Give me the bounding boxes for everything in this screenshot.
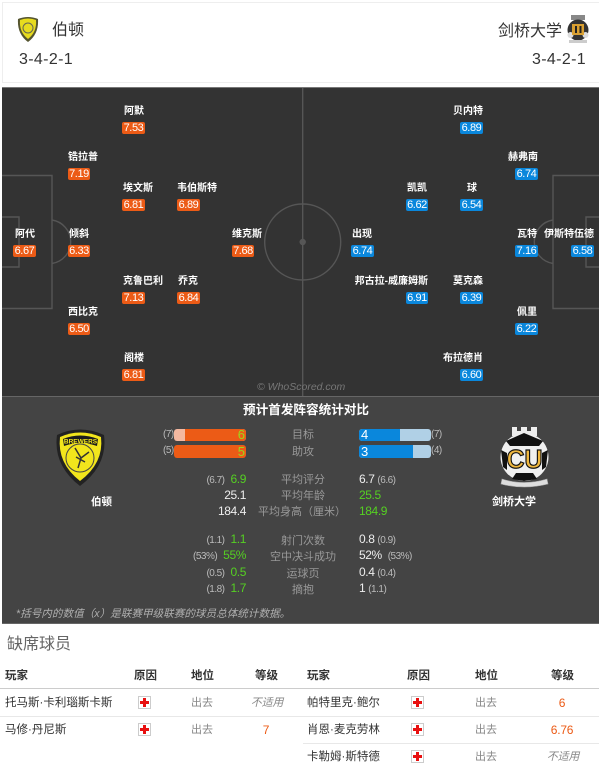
home stat values [193,472,246,595]
player: 阁楼: 6.81 [124,369,143,381]
icon: Burton Albion crest: BREWERS [64,438,98,446]
player: 阿代 [13,228,36,257]
assists league average home: (5) [163,445,174,456]
assists league average away: (4) [431,445,442,456]
player: 伊斯特伍德: 6.58 [573,245,592,257]
player: 球: 球 [467,183,477,194]
player: 凯凯: 6.62 [407,199,427,211]
footnote: *括号内的数值（x）是联赛甲级联赛的球员总体统计数据。 [16,608,290,620]
table: missing players home: 出去 [191,724,213,736]
table: missing players home: 托马斯·卡利瑙斯卡斯 [5,697,112,709]
home stat values: (1.1) 1.1 [206,532,246,546]
table: missing players away: 6 [559,696,565,710]
player: 锆拉普 [68,150,98,180]
player: 克鲁巴利: 克鲁巴利 [123,276,163,287]
table: missing players away: 玩家 [307,670,330,682]
away stat values: 184.9 [359,504,387,518]
away stat values: 1 (1.1) [359,581,386,595]
chart: assists bar home [174,445,246,458]
player: 韦伯斯特 [177,182,217,211]
player: 出现: 出现 [352,229,372,240]
away stat values: 6.7 (6.6) [359,472,395,486]
table: missing players home: 等级 [255,670,278,682]
stat labels: 目标 [292,429,314,441]
away stat values: 52% (53%) [359,548,412,562]
player: 邦古拉-威廉姆斯: 邦古拉-威廉姆斯 [355,276,428,287]
player: 球 [460,182,483,211]
pitch markings [2,88,599,396]
player: 乔克 [177,275,200,304]
icon: Burton crest small [18,17,38,42]
player: 赫弗南: 赫弗南 [508,152,538,163]
player: 球: 6.54 [462,199,481,211]
stat labels: 助攻 [292,446,314,458]
player: 伊斯特伍德 [544,228,594,257]
player: 克鲁巴利: 7.13 [124,292,143,304]
player: 赫弗南 [508,151,538,180]
away stat values [359,472,412,595]
player: 伊斯特伍德: 伊斯特伍德 [544,229,594,240]
panel: lineup stats comparison [2,397,599,624]
table: missing players home: 玩家 [5,670,28,682]
player: 阿默: 阿默 [124,106,144,117]
player: 贝内特: 贝内特 [453,106,483,117]
table: missing players away [303,669,599,763]
home stat values: 184.4 [218,504,246,518]
chart: goals bar home [174,429,246,441]
goals league average away: (7) [431,429,442,440]
table: missing players away: 出去 [475,697,497,709]
stat labels: 空中决斗成功 [270,551,336,563]
goals league average home: (7) [163,429,174,440]
table: missing players home [0,669,300,737]
player: 倾斜: 6.33 [69,245,89,257]
player: 莫克森: 6.39 [462,292,481,304]
player: 瓦特: 瓦特 [517,229,537,240]
player: 佩里: 佩里 [517,307,537,318]
table: missing players home: 地位 [191,670,214,682]
player: 阁楼 [122,352,145,381]
player: 阿代: 阿代 [15,229,35,240]
player: 凯凯 [406,182,428,211]
player: 埃文斯: 埃文斯 [123,183,153,194]
icon: Cambridge United crest [500,427,548,488]
table: missing players away: 出去 [475,724,497,736]
table: missing players away: 不适用 [547,751,579,763]
chart: assists bar home: 5 [238,444,245,459]
icon: Cambridge United crest: CU [506,444,542,474]
icon: Burton Albion crest [56,430,104,486]
table: missing players home: 不适用 [251,697,283,709]
table: missing players home: 出去 [191,697,213,709]
player: 贝内特: 6.89 [462,122,481,134]
player: 凯凯: 凯凯 [407,183,427,194]
player: 布拉德肖: 布拉德肖 [443,353,483,364]
table: missing players away: 地位 [475,670,498,682]
player: 布拉德肖 [443,352,483,381]
home stat values: 25.1 [224,488,246,502]
player: 贝内特 [453,105,483,134]
player: 瓦特 [515,228,538,257]
player: 维克斯: 维克斯 [232,229,262,240]
watermark: © WhoScored.com [257,381,345,393]
stat labels: 摘抱 [292,584,314,596]
player: 佩里: 6.22 [517,323,536,335]
player: 阁楼: 阁楼 [124,353,144,364]
table: missing players away: 卡勒姆·斯特德 [307,751,380,763]
table: missing players away: 6.76 [551,723,573,737]
player: 西比克: 西比克 [68,307,98,318]
player: 赫弗南: 6.74 [517,168,536,180]
home formation: 3-4-2-1 [19,51,73,68]
player: 倾斜 [68,228,90,257]
away team name: 剑桥大学 [498,23,562,40]
home team label: 伯顿 [91,496,112,508]
table: missing players home: 马修·丹尼斯 [5,724,66,736]
player: 乔克: 6.84 [179,292,198,304]
stat labels [258,428,346,596]
heading: missing players: 缺席球员 [7,636,71,653]
table: missing players away: 出去 [475,751,497,763]
table: missing players away: 帕特里克·鲍尔 [307,697,380,709]
player: 出现 [351,228,374,257]
player: 布拉德肖: 6.60 [462,369,481,381]
player: 维克斯: 7.68 [233,245,253,257]
chart: goals bar away [359,429,431,441]
player: 锆拉普: 7.19 [69,168,89,180]
player: 韦伯斯特: 6.89 [179,199,198,211]
table: missing players away: 等级 [551,670,574,682]
home stat values: (53%) 55% [193,548,246,562]
away stat values: 0.4 (0.4) [359,565,395,579]
player: 阿默: 7.53 [124,122,143,134]
stat labels: 运球页 [286,568,320,580]
player: 莫克森 [453,275,483,304]
player: 瓦特: 7.16 [517,245,536,257]
player: 邦古拉-威廉姆斯: 6.91 [407,292,427,304]
home team name: 伯顿 [52,22,84,39]
table: missing players away: 原因 [407,670,430,682]
player: 维克斯 [232,228,262,257]
player: 埃文斯: 6.81 [124,199,143,211]
stat labels: 平均评分 [281,474,325,486]
away stat values: 25.5 [359,488,381,502]
home stat values: (1.8) 1.7 [206,581,246,595]
player: 锆拉普: 锆拉普 [68,152,98,163]
player: 佩里 [515,306,538,335]
stat labels: 平均年龄 [281,490,325,502]
table: missing players away: 肖恩·麦克劳林 [307,724,380,736]
player: 出现: 6.74 [353,245,372,257]
player: 倾斜: 倾斜 [69,229,89,240]
player: 韦伯斯特: 韦伯斯特 [177,183,217,194]
player: 克鲁巴利 [122,275,163,304]
player: 莫克森: 莫克森 [453,276,483,287]
stats heading: 预计首发阵容统计对比 [243,403,369,417]
panel: pitch [2,87,599,397]
away formation: 3-4-2-1 [532,51,586,68]
player: 阿默 [122,105,145,134]
home stat values: (6.7) 6.9 [206,472,246,486]
header panel: teams and formations [2,2,599,83]
player: 埃文斯 [122,182,153,211]
player: 邦古拉-威廉姆斯 [355,274,428,304]
chart: assists bar away [359,445,431,458]
player: 西比克 [68,306,98,335]
stat labels: 平均身高（厘米） [258,506,346,518]
player: 西比克: 6.50 [69,323,89,335]
table: missing players home: 7 [263,723,269,737]
player: 阿代: 6.67 [15,245,34,257]
icon: Cambridge crest small [568,15,588,43]
home stat values: (0.5) 0.5 [206,565,246,579]
stat labels: 射门次数 [281,535,325,547]
player: 乔克: 乔克 [178,276,198,287]
table: missing players home: 原因 [134,670,157,682]
away team label: 剑桥大学 [492,496,536,508]
away stat values: 0.8 (0.9) [359,532,395,546]
